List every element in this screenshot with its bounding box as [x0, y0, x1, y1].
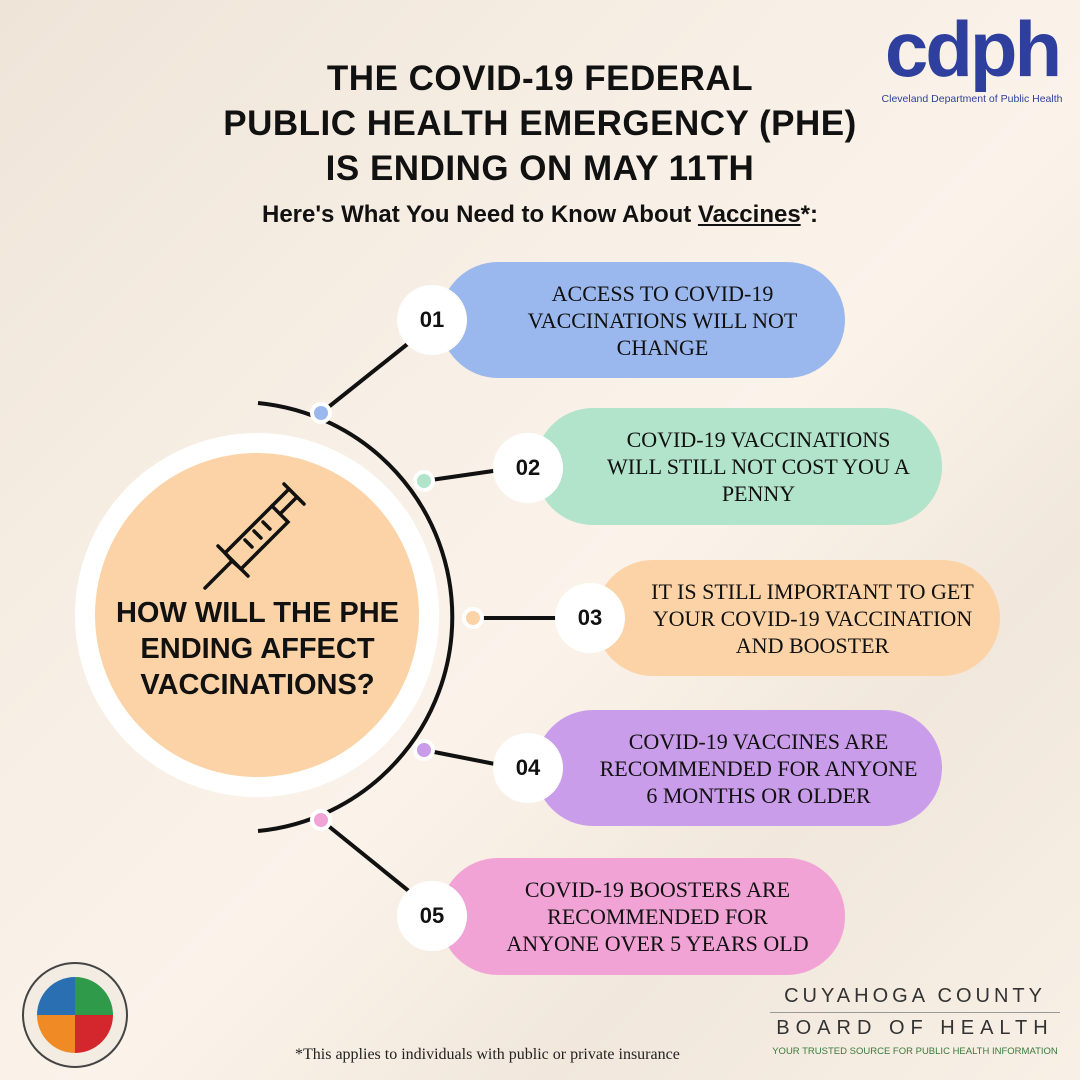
circle heading — [116, 597, 399, 701]
pill 2 — [535, 408, 942, 525]
logo: cuyahoga county seal — [22, 962, 128, 1068]
dots — [312, 404, 482, 829]
text: 02 — [516, 455, 540, 480]
title: THE COVID-19 FEDERAL — [327, 59, 753, 98]
pill 4: RECOMMENDED FOR ANYONE — [600, 756, 917, 780]
circle heading: VACCINATIONS? — [140, 669, 375, 701]
footnote: *This applies to individuals with public or private insurance — [295, 1046, 680, 1063]
pill 3 — [595, 560, 1000, 676]
number circles — [397, 285, 467, 355]
icon: syringe — [205, 484, 304, 588]
circle heading: ENDING AFFECT — [140, 633, 375, 665]
pill 5: RECOMMENDED FOR — [547, 904, 768, 929]
title — [223, 59, 857, 188]
pill 2: WILL STILL NOT COST YOU A — [607, 454, 910, 479]
logo: cuyahoga county board of health — [770, 985, 1060, 1057]
title: IS ENDING ON MAY 11TH — [326, 149, 754, 188]
pill 4: 6 MONTHS OR OLDER — [646, 782, 871, 808]
circle heading: HOW WILL THE PHE — [116, 597, 399, 629]
logo: cuyahoga county board of health: YOUR TRUSTED SOURCE FOR PUBLIC HEALTH INFORMATION — [772, 1046, 1058, 1057]
pill 1: ACCESS TO COVID-19 — [552, 280, 773, 306]
pill 5: COVID-19 BOOSTERS ARE — [525, 877, 790, 902]
pill 2: PENNY — [722, 481, 795, 506]
logo: cdph: Cleveland Department of Public Health — [882, 93, 1062, 105]
pill 5 — [440, 858, 845, 975]
pill 4: COVID-19 VACCINES ARE — [629, 728, 888, 754]
pill 4 — [535, 710, 942, 826]
number circles: 01 — [420, 307, 444, 332]
pill 2: COVID-19 VACCINATIONS — [627, 427, 890, 452]
pill 1: VACCINATIONS WILL NOT — [528, 308, 797, 332]
text: 04 — [516, 755, 540, 780]
logo: cuyahoga county board of health: BOARD OF HEALTH — [776, 1017, 1054, 1039]
pill 1 — [440, 262, 845, 378]
big circle — [75, 433, 439, 797]
logo: cuyahoga county board of health: CUYAHOGA COUNTY — [784, 985, 1046, 1007]
logo: cdph: cdph — [885, 5, 1059, 93]
pill 3: AND BOOSTER — [736, 632, 889, 658]
title: PUBLIC HEALTH EMERGENCY (PHE) — [223, 104, 857, 143]
pill 5: ANYONE OVER 5 YEARS OLD — [506, 931, 809, 956]
text: 03 — [578, 605, 602, 630]
text: 05 — [420, 903, 444, 928]
pill 1: CHANGE — [617, 334, 708, 360]
pill 3: YOUR COVID-19 VACCINATION — [653, 606, 972, 630]
pill 3: IT IS STILL IMPORTANT TO GET — [651, 578, 974, 604]
subtitle: Here's What You Need to Know About Vaccines*: — [262, 201, 818, 228]
